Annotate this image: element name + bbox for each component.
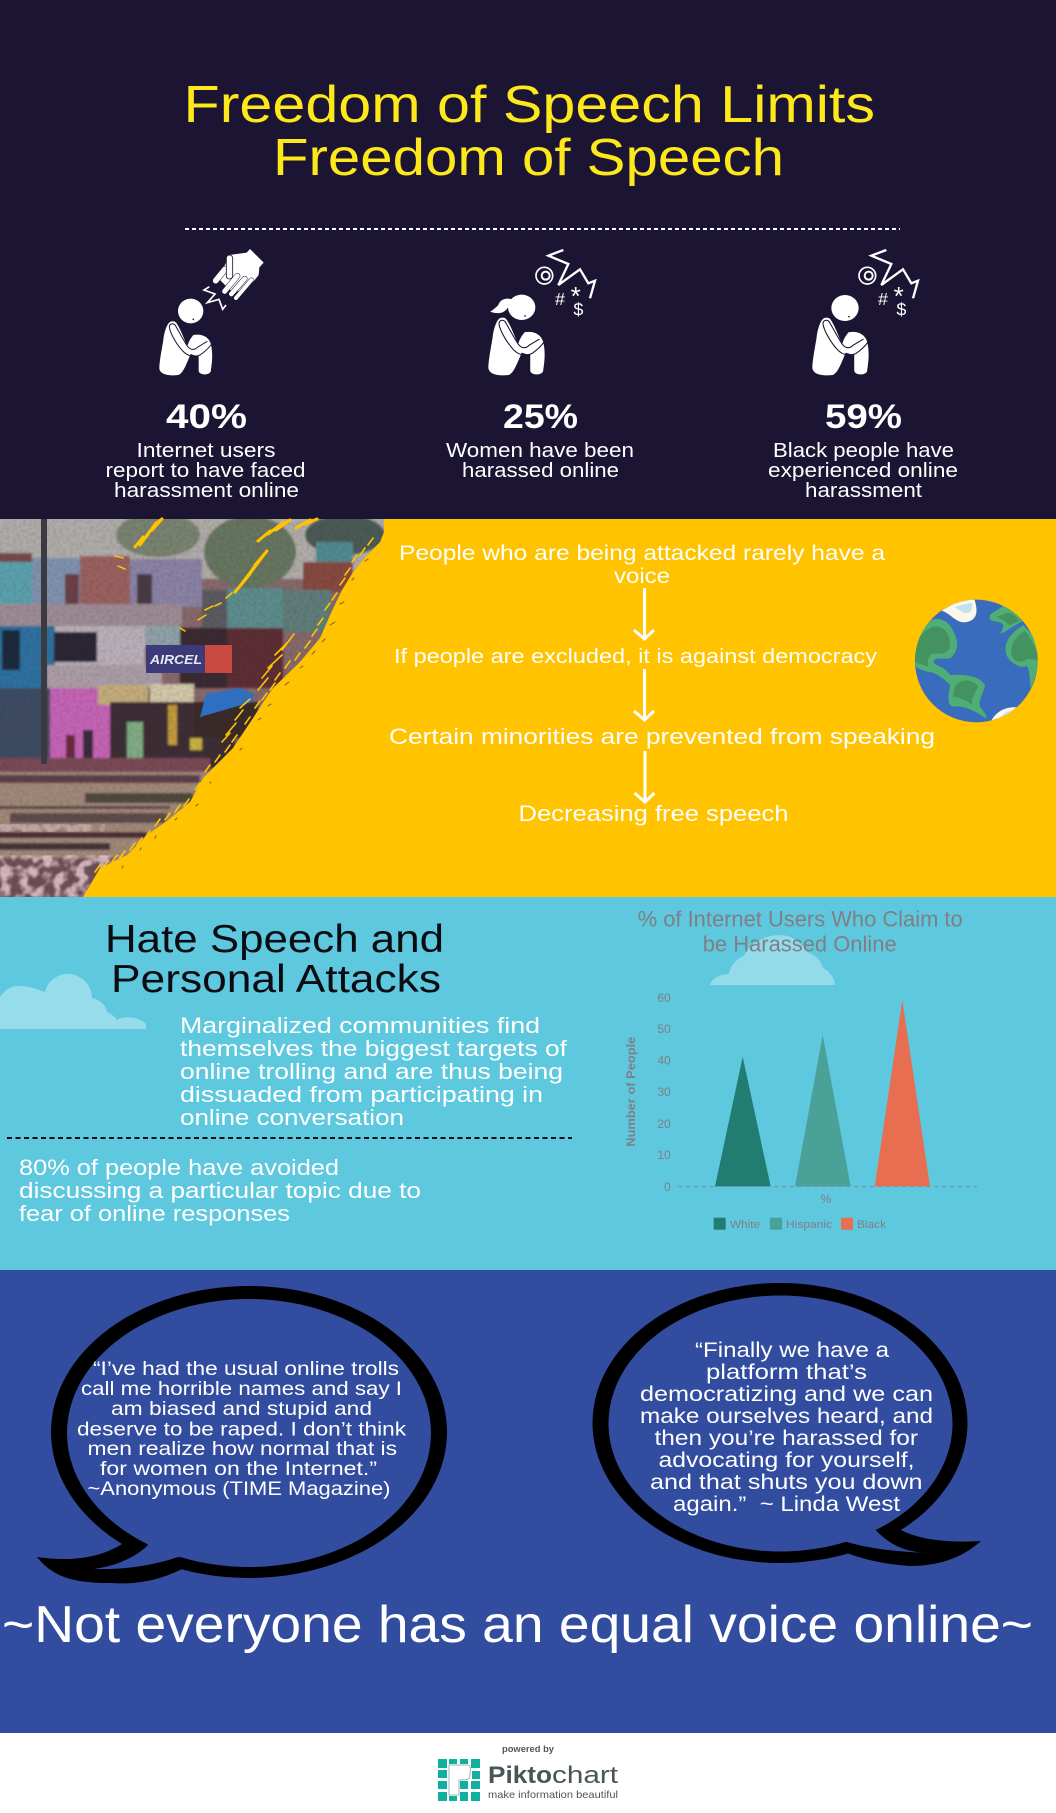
quote: Linda West: “Finally we have a (695, 1338, 889, 1362)
quote: Linda West: make ourselves heard, and (640, 1404, 933, 1428)
quote: Linda West: again.” ~ Linda West (673, 1492, 900, 1516)
quote: Linda West: democratizing and we can (640, 1382, 933, 1406)
icon: black person receiving abuse: $ (896, 299, 906, 319)
brush edge streaks (95, 519, 373, 872)
quote: anonymous: am biased and stupid and (111, 1398, 372, 1420)
icon: black person receiving abuse (812, 250, 918, 375)
panel: footer logo (0, 1733, 1056, 1813)
y axis labels: 20 (657, 1117, 671, 1131)
quote: anonymous (77, 1358, 406, 1500)
chart title (638, 907, 963, 957)
text: marginalized communities: Marginalized communities find (180, 1013, 540, 1038)
spike: White (715, 1057, 771, 1186)
text: 80 percent avoided (19, 1155, 421, 1226)
legend: White (730, 1219, 760, 1231)
text: chain step 4: Decreasing free speech (518, 801, 788, 826)
icon: woman receiving abuse (488, 250, 595, 375)
title (184, 76, 875, 187)
y axis labels: 0 (664, 1180, 671, 1194)
title: Freedom of Speech (273, 129, 784, 187)
text: marginalized communities: themselves the biggest targets of (180, 1036, 568, 1061)
stat: 25 percent: harassed online (462, 459, 619, 482)
y axis labels: 50 (657, 1022, 671, 1036)
wordmark: chart (552, 1762, 618, 1789)
rubble on the ground (0, 824, 130, 897)
stat: 40 percent: 40% (166, 398, 247, 436)
wordmark: make information beautiful (488, 1789, 618, 1801)
cloud: left (0, 974, 146, 1029)
quote: anonymous: call me horrible names and say I (81, 1378, 402, 1400)
y axis labels: 30 (657, 1085, 671, 1099)
chart title: be Harassed Online (703, 932, 897, 957)
photo: trackside street scene (0, 509, 394, 908)
panel: quotes (0, 1270, 1056, 1733)
spike: Hispanic (795, 1035, 851, 1186)
stat: 59 percent: experienced online (768, 459, 958, 482)
text: 80 percent avoided: 80% of people have avoided (19, 1155, 339, 1180)
chart title: % of Internet Users Who Claim to (638, 907, 963, 932)
icon: person struck by a fist (159, 249, 264, 375)
panel: header (0, 0, 1056, 519)
arrow: step 1 to step 2 (634, 588, 654, 639)
icon: woman receiving abuse: # (555, 289, 565, 309)
text: chain step 3: Certain minorities are prevented from speaking (389, 724, 935, 749)
quote: anonymous: deserve to be raped. I don’t think (77, 1418, 406, 1440)
bar chart: harassed online by race (624, 907, 977, 1231)
legend (714, 1218, 887, 1231)
panel: democracy chain (0, 509, 1056, 908)
stat: 25 percent: 25% (503, 398, 578, 436)
y axis labels: 40 (657, 1054, 671, 1068)
quote: anonymous: men realize how normal that is (88, 1438, 397, 1460)
stat: 40 percent: report to have faced (106, 459, 306, 482)
wordmark: Pikto (488, 1762, 552, 1789)
icon: woman receiving abuse: * (571, 281, 581, 311)
legend: Hispanic (786, 1219, 833, 1231)
quote: Linda West: advocating for yourself, (658, 1448, 914, 1472)
quote: Linda West (640, 1338, 933, 1516)
stat: 40 percent: harassment online (114, 479, 299, 502)
sign: AIRCEL: AIRCEL (149, 652, 202, 667)
panel: hate speech (0, 897, 1056, 1270)
text: marginalized communities: dissuaded from participating in (180, 1082, 543, 1107)
text: 80 percent avoided: discussing a particular topic due to (19, 1178, 421, 1203)
stat: 40 percent: Internet users (136, 439, 276, 462)
quote: anonymous: for women on the Internet.” (100, 1458, 377, 1480)
icon: Piktochart grid logo (438, 1759, 480, 1801)
legend: Black (857, 1219, 887, 1231)
quote: Linda West: then you’re harassed for (654, 1426, 918, 1450)
text: marginalized communities: online conversation (180, 1105, 404, 1130)
y axis labels (657, 991, 671, 1194)
quote: anonymous: ~Anonymous (TIME Magazine) (88, 1478, 390, 1500)
stat: 25 percent (446, 398, 634, 482)
y axis labels: 60 (657, 991, 671, 1005)
heading: Hate Speech and (105, 918, 444, 961)
stat: 40 percent (106, 398, 306, 502)
quote: Linda West: platform that’s (706, 1360, 867, 1384)
icon: woman receiving abuse: $ (573, 299, 583, 319)
icon: globe (913, 598, 1040, 722)
text: marginalized communities (180, 1013, 568, 1130)
text: chain step 1: voice (614, 565, 670, 588)
icon: black person receiving abuse: # (878, 289, 888, 309)
text: 80 percent avoided: fear of online responses (19, 1201, 290, 1226)
icon: black person receiving abuse: * (894, 281, 904, 311)
x axis label: % (821, 1192, 832, 1206)
sign: AIRCEL (146, 645, 232, 673)
closing statement: ~Not everyone has an equal voice online~ (2, 1596, 1033, 1654)
quote: anonymous: “I’ve had the usual online trolls (93, 1358, 399, 1380)
speech bubble: left (37, 1286, 447, 1583)
wordmark (488, 1762, 618, 1801)
y axis title: Number of People (624, 1036, 638, 1147)
quote: Linda West: and that shuts you down (650, 1470, 922, 1494)
text: chain step 2: If people are excluded, it is against democracy (394, 645, 878, 668)
title: Freedom of Speech Limits (184, 76, 875, 134)
text: chain step 1: People who are being attacked rarely have a (399, 542, 885, 565)
stat: 59 percent: harassment (805, 479, 922, 502)
heading (105, 918, 444, 1001)
speech bubble: right (592, 1283, 981, 1566)
panel: footer logo: powered by (502, 1744, 555, 1755)
y axis labels: 10 (657, 1148, 671, 1162)
arrow: step 2 to step 3 (634, 669, 654, 720)
arrow: step 3 to step 4 (634, 751, 654, 802)
heading: Personal Attacks (111, 958, 441, 1001)
stat: 59 percent (768, 398, 958, 502)
spike: Black (875, 1000, 930, 1186)
text: chain step 1 (399, 542, 885, 588)
stat: 59 percent: 59% (825, 398, 902, 436)
stat: 25 percent: Women have been (446, 439, 634, 462)
cloud: behind chart (710, 935, 835, 985)
text: marginalized communities: online trolling and are thus being (180, 1059, 563, 1084)
stat: 59 percent: Black people have (773, 439, 954, 462)
